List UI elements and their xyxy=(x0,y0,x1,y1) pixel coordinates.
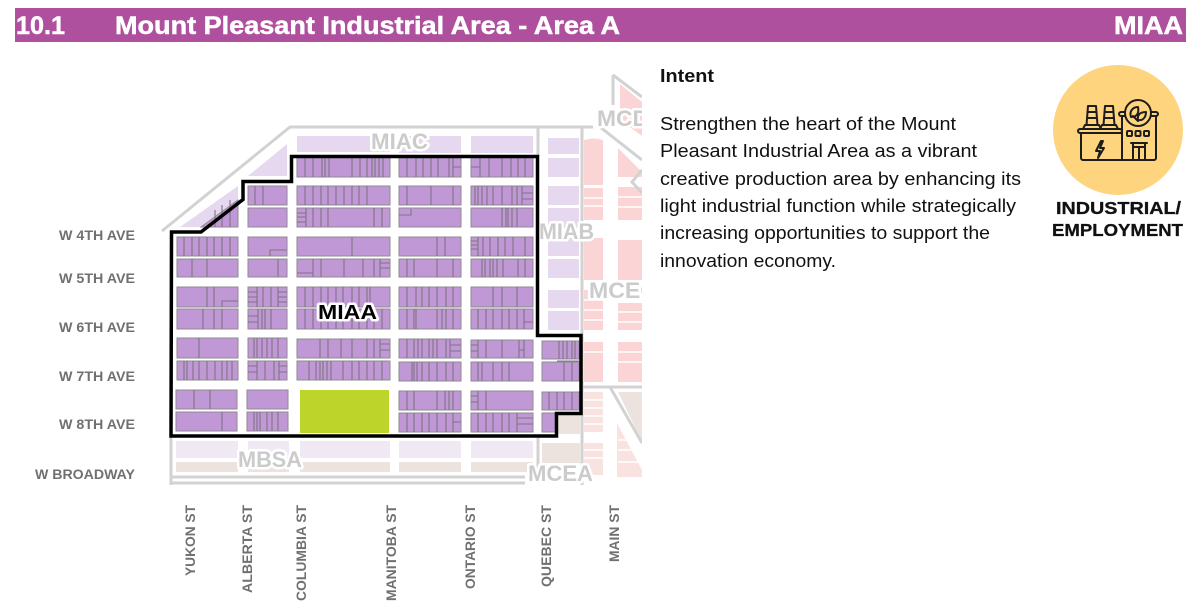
label: MIAA: MIAA xyxy=(318,301,377,324)
header bar: 10.1 xyxy=(16,12,65,40)
header bar: Mount Pleasant Industrial Area - Area A xyxy=(115,12,620,40)
icon: industrial/employment xyxy=(1053,65,1183,195)
map xyxy=(162,75,657,486)
highlighted green site xyxy=(300,390,389,433)
surrounding faded context xyxy=(162,75,642,485)
avenue labels: W 4TH AVE xyxy=(59,228,135,243)
label: MBSA: MBSA xyxy=(238,447,302,472)
street labels: QUEBEC ST xyxy=(539,504,554,587)
street labels: ONTARIO ST xyxy=(463,504,478,589)
street labels: MAIN ST xyxy=(607,504,622,562)
intent heading: Intent xyxy=(660,65,714,86)
street labels: MANITOBA ST xyxy=(384,504,399,601)
avenue labels: W 6TH AVE xyxy=(59,320,135,335)
header bar xyxy=(15,8,1186,42)
intent text: light industrial function while strategically xyxy=(660,195,1017,216)
intent text: creative production area by enhancing its xyxy=(660,168,1021,189)
intent text xyxy=(660,113,1021,271)
street labels: YUKON ST xyxy=(183,504,198,576)
icon label: EMPLOYMENT xyxy=(1052,220,1183,240)
avenue labels: W BROADWAY xyxy=(35,467,135,482)
header bar: MIAA xyxy=(1114,12,1183,40)
intent text: innovation economy. xyxy=(660,250,836,271)
avenue labels: W 8TH AVE xyxy=(59,417,135,432)
street labels: ALBERTA ST xyxy=(240,504,255,593)
label: MIAB: MIAB xyxy=(539,219,594,244)
label: MCD: MCD xyxy=(597,106,649,131)
street labels xyxy=(183,504,622,601)
street labels: COLUMBIA ST xyxy=(294,504,309,601)
parcels: industrial blocks xyxy=(176,157,579,432)
icon label: INDUSTRIAL/ xyxy=(1056,198,1181,218)
label: MCEC: MCEC xyxy=(589,278,657,303)
icon label xyxy=(1052,198,1183,240)
intent text: Pleasant Industrial Area as a vibrant xyxy=(660,140,977,161)
intent text: increasing opportunities to support the xyxy=(660,222,990,243)
label: MIAC: MIAC xyxy=(371,129,428,154)
intent text: Strengthen the heart of the Mount xyxy=(660,113,956,134)
avenue labels: W 5TH AVE xyxy=(59,271,135,286)
MIAA boundary xyxy=(171,156,581,436)
avenue labels xyxy=(35,228,135,482)
label: MCEA: MCEA xyxy=(528,461,593,486)
avenue labels: W 7TH AVE xyxy=(59,369,135,384)
